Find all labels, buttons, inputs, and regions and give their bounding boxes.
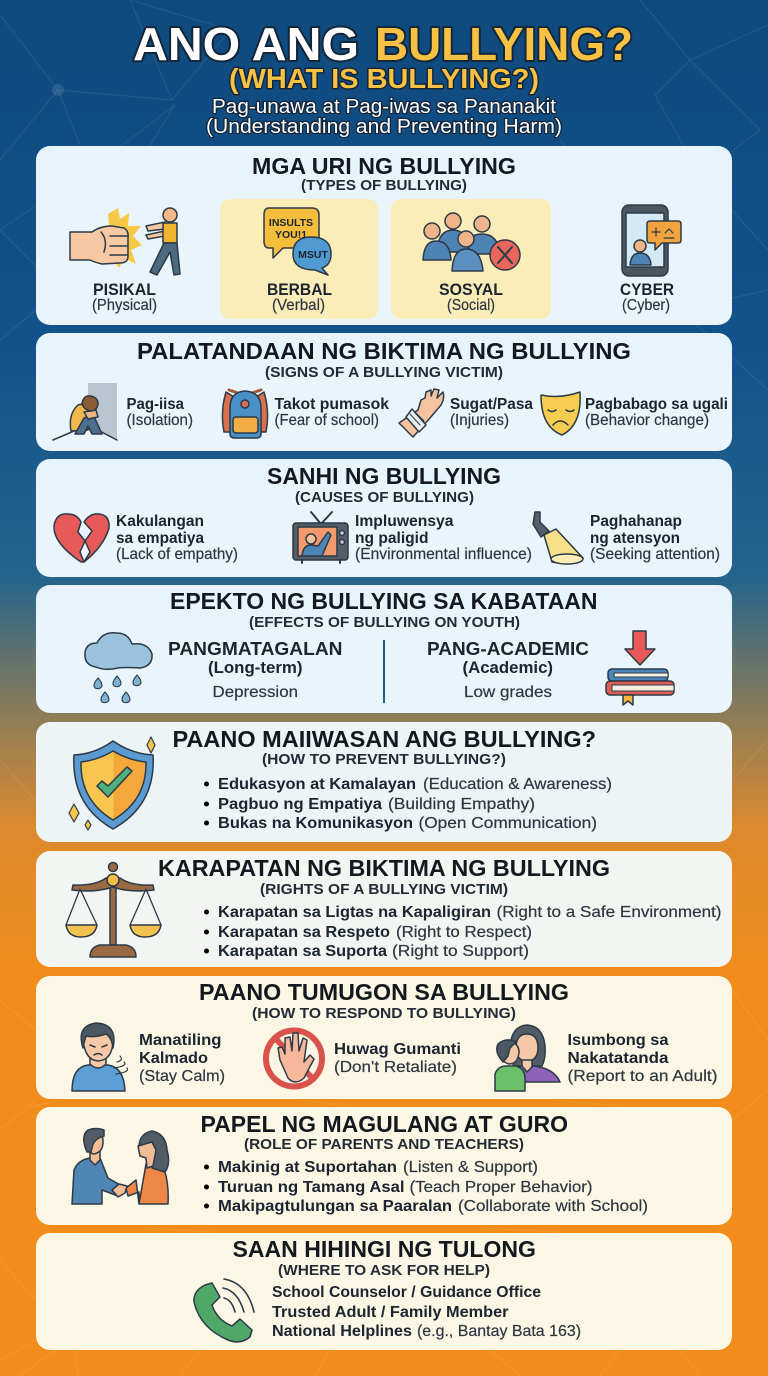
- heading: signs: [137, 338, 631, 381]
- label: cyber: (Cyber): [622, 297, 670, 314]
- label: seeking attention: ng atensyon: [590, 530, 680, 547]
- heading: effects: [170, 588, 598, 631]
- label: physical: [92, 280, 157, 314]
- label: social: [439, 280, 503, 314]
- icon: bandaged hand: [399, 389, 444, 437]
- list: parents and teachers: Makipagtulungan sa Paaralan: [218, 1198, 452, 1215]
- panel: where to ask for help: [36, 1233, 732, 1350]
- list: help contacts: National Helplines: [272, 1323, 412, 1340]
- list: help contacts: [272, 1284, 581, 1340]
- heading: prevent: PAANO MAIIWASAN ANG BULLYING?: [172, 726, 596, 752]
- label: environmental influence: ng paligid: [355, 530, 428, 547]
- list: prevention: [204, 776, 612, 832]
- heading: effects: EPEKTO NG BULLYING SA KABATAAN: [170, 588, 598, 614]
- tagline: Pag-unawa at Pag-iwas sa Pananakit: [212, 96, 556, 118]
- label: seeking attention: [590, 513, 720, 563]
- icon: backpack: [222, 390, 268, 438]
- tagline: (Understanding and Preventing Harm): [206, 116, 562, 138]
- heading: types: [252, 153, 516, 194]
- label: fear of school: [274, 396, 389, 429]
- text: long-term: [168, 639, 342, 701]
- list: rights: (Right to a Safe Environment): [496, 904, 722, 921]
- list: help contacts: School Counselor / Guidance Office: [272, 1284, 541, 1301]
- tagline: [206, 96, 562, 138]
- heading: types: (TYPES OF BULLYING): [301, 177, 467, 194]
- label: report to an adult: (Report to an Adult): [568, 1068, 718, 1085]
- list: rights: (Right to Support): [392, 943, 529, 960]
- icon: scales of justice: [66, 862, 161, 957]
- label: injuries: Sugat/Pasa: [450, 396, 533, 413]
- label: physical: PISIKAL: [93, 280, 156, 299]
- label: verbal: (Verbal): [272, 297, 325, 314]
- icon: telephone: [194, 1279, 254, 1342]
- panel: rights of a bullying victim: [36, 851, 732, 967]
- label: stay calm: [139, 1032, 225, 1085]
- label: stay calm: Manatiling: [139, 1032, 222, 1049]
- panel: effects of bullying: [36, 585, 732, 713]
- panel: how to respond: [36, 976, 732, 1099]
- list: prevention: (Education & Awareness): [423, 776, 612, 793]
- panel: how to prevent bullying: [36, 722, 732, 842]
- label: don't retaliate: [334, 1041, 461, 1076]
- list: prevention: Bukas na Komunikasyon: [218, 815, 413, 832]
- label: fear of school: Takot pumasok: [274, 396, 389, 413]
- heading: help: [232, 1236, 536, 1279]
- icon: spotlight: [533, 512, 583, 564]
- icon: rain cloud: [85, 633, 152, 703]
- label: isolation: (Isolation): [126, 412, 193, 429]
- label: environmental influence: Impluwensya: [355, 513, 454, 530]
- label: cyber: [620, 280, 674, 314]
- heading: rights: KARAPATAN NG BIKTIMA NG BULLYING: [158, 855, 610, 881]
- label: social: SOSYAL: [439, 280, 503, 299]
- list: parents and teachers: Turuan ng Tamang Asal: [218, 1179, 404, 1196]
- label: report to an adult: Nakatatanda: [568, 1050, 669, 1067]
- label: verbal: BERBAL: [267, 280, 332, 299]
- label: report to an adult: [568, 1032, 718, 1085]
- heading: prevent: (HOW TO PREVENT BULLYING?): [262, 751, 506, 768]
- list: rights: Karapatan sa Suporta: [218, 943, 387, 960]
- heading: help: (WHERE TO ASK FOR HELP): [278, 1262, 490, 1279]
- heading: prevent: [172, 726, 596, 768]
- list: parents and teachers: [204, 1159, 648, 1215]
- list: prevention: (Open Communication): [418, 815, 597, 832]
- heading: parents and teachers: (ROLE OF PARENTS AND TEACHERS): [244, 1136, 524, 1153]
- label: isolation: Pag-iisa: [126, 396, 184, 413]
- text: academic: Low grades: [464, 684, 552, 701]
- highlight: social card: [391, 199, 551, 319]
- label: behavior change: Pagbabago sa ugali: [585, 396, 728, 413]
- heading: signs: (SIGNS OF A BULLYING VICTIM): [265, 364, 503, 381]
- heading: types: MGA URI NG BULLYING: [252, 153, 516, 179]
- list: parents and teachers: (Listen & Support): [403, 1159, 538, 1176]
- heading: effects: (EFFECTS OF BULLYING ON YOUTH): [249, 614, 520, 631]
- heading: parents and teachers: [200, 1111, 568, 1153]
- list: parents and teachers: (Collaborate with School): [458, 1198, 648, 1215]
- icon: speech bubbles: YOU!1: [275, 229, 307, 241]
- icon: broken heart: [54, 514, 109, 562]
- label: lack of empathy: Kakulangan: [116, 513, 204, 530]
- label: lack of empathy: [116, 513, 238, 563]
- list: help contacts: (e.g., Bantay Bata 163): [417, 1323, 581, 1340]
- icon: speech bubbles: INSULTS: [269, 217, 313, 229]
- highlight: verbal card: [220, 199, 378, 319]
- heading: help: SAAN HIHINGI NG TULONG: [232, 1236, 536, 1262]
- label: environmental influence: (Environmental influence): [355, 546, 532, 563]
- heading: rights: (RIGHTS OF A BULLYING VICTIM): [260, 881, 508, 898]
- heading: respond: [199, 979, 569, 1022]
- label: behavior change: [585, 396, 728, 429]
- label: stay calm: Kalmado: [139, 1050, 208, 1067]
- label: lack of empathy: sa empatiya: [116, 530, 204, 547]
- icon: sad mask: [541, 392, 580, 435]
- label: seeking attention: Paghahanap: [590, 513, 682, 530]
- icon: phone with chat: [622, 205, 681, 276]
- heading: causes: SANHI NG BULLYING: [267, 463, 501, 489]
- label: stay calm: (Stay Calm): [139, 1068, 225, 1085]
- text: academic: PANG-ACADEMIC: [427, 639, 589, 659]
- label: seeking attention: (Seeking attention): [590, 546, 720, 563]
- panel: types of bullying: [36, 146, 732, 325]
- label: lack of empathy: (Lack of empathy): [116, 546, 238, 563]
- title: ano ang bullying: BULLYING?: [375, 18, 633, 70]
- list: help contacts: Trusted Adult / Family Member: [272, 1304, 508, 1321]
- label: cyber: CYBER: [620, 280, 674, 299]
- text: academic: [427, 639, 589, 701]
- label: verbal: [267, 280, 332, 314]
- label: report to an adult: Isumbong sa: [568, 1032, 669, 1049]
- icon: child and adult: [495, 1025, 560, 1091]
- panel: role of parents and teachers: [36, 1107, 732, 1225]
- label: environmental influence: [355, 513, 532, 563]
- text: long-term: Depression: [212, 684, 298, 701]
- icon: calm person: [72, 1023, 128, 1091]
- icon: shield with check: [69, 737, 155, 830]
- heading: parents and teachers: PAPEL NG MAGULANG AT GURO: [200, 1111, 568, 1137]
- list: rights: Karapatan sa Respeto: [218, 924, 390, 941]
- list: rights: (Right to Respect): [396, 924, 532, 941]
- heading: respond: (HOW TO RESPOND TO BULLYING): [252, 1005, 516, 1022]
- heading: respond: PAANO TUMUGON SA BULLYING: [199, 979, 569, 1005]
- icon: stop hand: [266, 1030, 322, 1086]
- list: prevention: Pagbuo ng Empatiya: [218, 796, 382, 813]
- panel: causes of bullying: [36, 459, 732, 577]
- list: parents and teachers: Makinig at Suportahan: [218, 1159, 397, 1176]
- label: injuries: (Injuries): [450, 412, 509, 429]
- panel: signs of a bullying victim: [36, 333, 732, 451]
- icon: speech bubbles: [264, 208, 331, 275]
- text: long-term: (Long-term): [208, 658, 302, 677]
- heading: causes: [267, 463, 501, 506]
- title: [133, 18, 633, 138]
- label: physical: (Physical): [92, 297, 157, 314]
- label: behavior change: (Behavior change): [585, 412, 709, 429]
- icon: books and down arrow: [606, 631, 674, 705]
- icon: speech bubbles: MSUT: [298, 249, 328, 261]
- icon: group with excluded mark: [423, 213, 520, 271]
- list: rights: [204, 904, 722, 960]
- title: ano ang bullying: [133, 18, 633, 70]
- label: fear of school: (Fear of school): [274, 412, 379, 429]
- label: social: (Social): [447, 297, 495, 314]
- text: long-term: PANGMATAGALAN: [168, 639, 342, 659]
- icon: television: [293, 512, 348, 563]
- list: prevention: (Building Empathy): [388, 796, 535, 813]
- list: parents and teachers: (Teach Proper Behavior): [410, 1179, 592, 1196]
- label: isolation: [126, 396, 193, 429]
- icon: fist and person: [70, 208, 180, 275]
- subtitle: what is bullying: (WHAT IS BULLYING?): [229, 63, 539, 94]
- heading: signs: PALATANDAAN NG BIKTIMA NG BULLYING: [137, 338, 631, 364]
- divider: [383, 640, 385, 703]
- list: rights: Karapatan sa Ligtas na Kapaligiran: [218, 904, 491, 921]
- list: prevention: Edukasyon at Kamalayan: [218, 776, 416, 793]
- icon: handshake: [72, 1128, 169, 1204]
- label: injuries: [450, 396, 533, 429]
- text: academic: (Academic): [462, 658, 553, 677]
- label: don't retaliate: (Don't Retaliate): [334, 1059, 457, 1076]
- label: don't retaliate: Huwag Gumanti: [334, 1041, 461, 1058]
- heading: causes: (CAUSES OF BULLYING): [295, 489, 474, 506]
- title: ano ang bullying: ANO ANG: [133, 18, 359, 70]
- heading: rights: [158, 855, 610, 898]
- icon: isolation: [53, 383, 117, 440]
